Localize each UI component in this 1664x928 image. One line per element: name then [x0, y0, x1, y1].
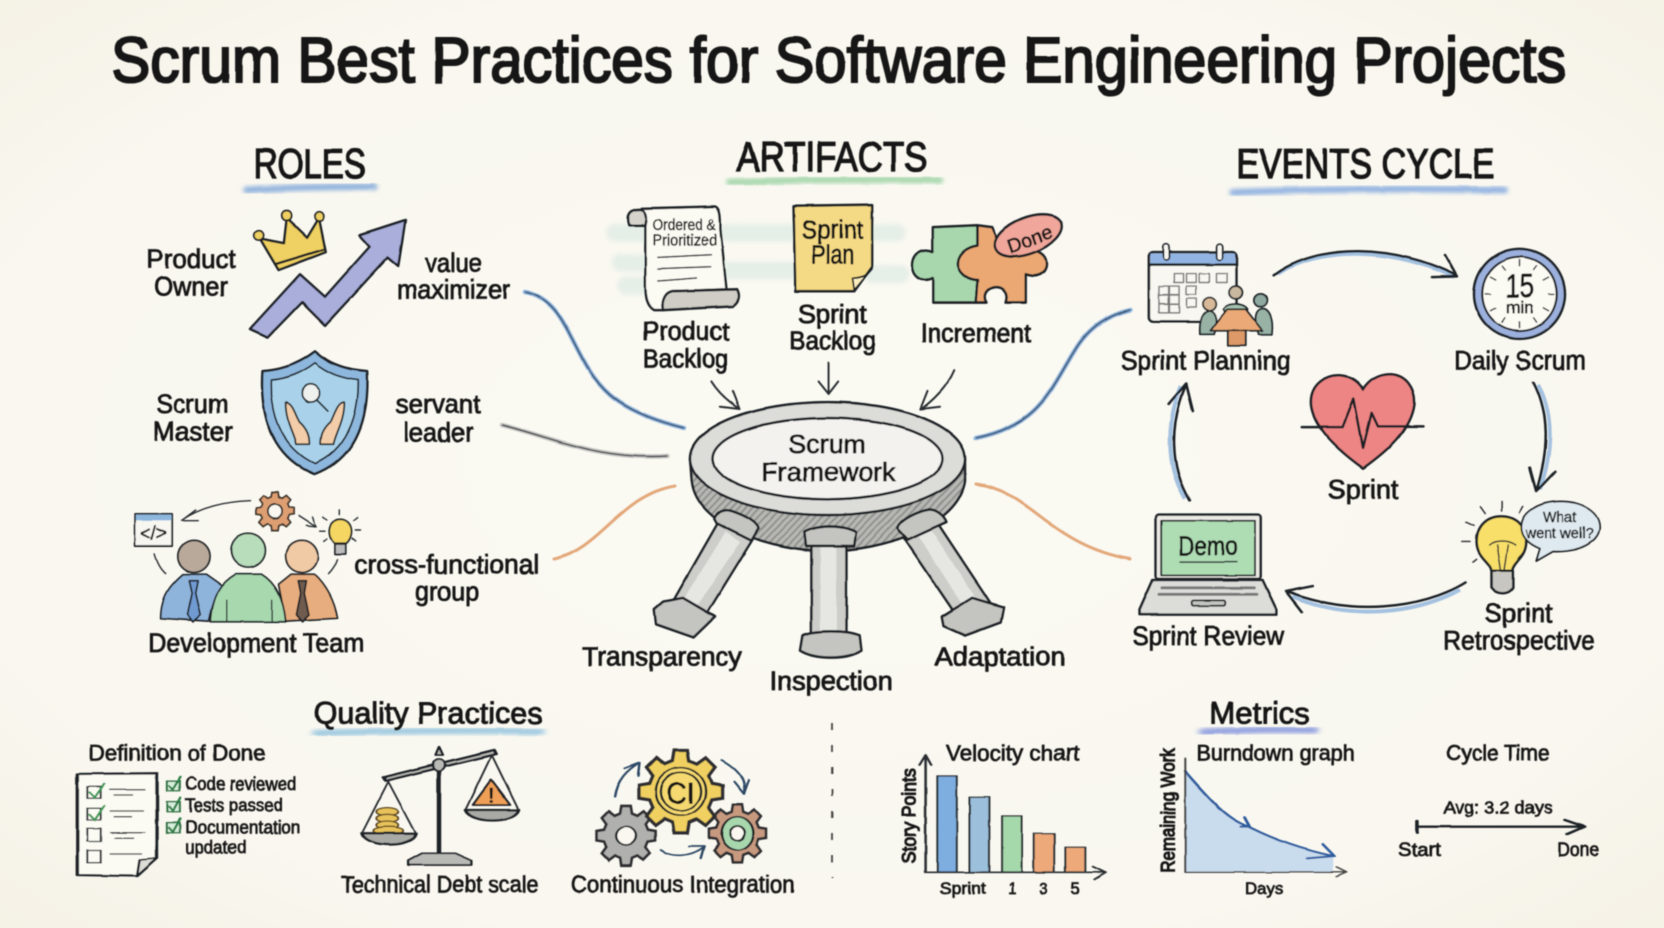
- person: left: [161, 540, 223, 622]
- label: Adaptation: Adaptation: [935, 643, 1066, 672]
- icon: crown: [254, 211, 326, 270]
- chart: cycle time: [1398, 741, 1599, 861]
- arrow: gear to lightbulb: [299, 516, 316, 526]
- icon: code window: </>: [140, 524, 167, 545]
- icon: puzzle increment: Done: [1005, 222, 1055, 258]
- label: Done: Done: [1557, 839, 1599, 861]
- label: servant leader: [396, 389, 481, 447]
- icon: retrospective lightbulb and speech bubble: What: [1543, 509, 1577, 526]
- label: value maximizer: value: [425, 248, 482, 278]
- axis label: Remaining Work: Remaining Work: [1158, 747, 1179, 873]
- axis ticks: 5: [1071, 879, 1080, 898]
- icon: code window: [135, 514, 172, 546]
- axes: [919, 755, 1106, 879]
- icon: sprint plan sticky note: Sprint: [802, 216, 863, 245]
- axis label: Story Points: Story Points: [899, 768, 920, 863]
- axis ticks: 1: [1008, 879, 1016, 898]
- pillar capitals: [714, 509, 946, 541]
- icon: puzzle increment: [912, 206, 1067, 302]
- icon: development team: [135, 492, 360, 622]
- panel: artifacts and framework: [582, 133, 1067, 696]
- icon: sprint planning calendar: [1149, 244, 1272, 346]
- label: Definition of Done: Definition of Done: [89, 741, 265, 765]
- checklist text: Code reviewed: [185, 774, 296, 795]
- table: scrum framework: [690, 402, 965, 551]
- arrow: product backlog to framework: [711, 382, 740, 409]
- arrow: retrospective to review: [1286, 582, 1465, 612]
- pillar: transparency: [654, 519, 752, 637]
- connector: framework to Sprint Review: [976, 484, 1130, 559]
- arrow: increment to framework: [920, 370, 954, 409]
- icon: lightbulb: [320, 510, 360, 554]
- icon: product backlog scroll: [628, 207, 739, 310]
- icon: retrospective lightbulb and speech bubble: [1462, 501, 1600, 593]
- icon: technical debt scale: !: [488, 784, 495, 807]
- label: value maximizer: [397, 248, 510, 305]
- label: Continuous Integration: Continuous Integration: [571, 871, 795, 898]
- connector: Product Owner to framework: [525, 292, 684, 428]
- icon: 15 min timer: [1474, 249, 1565, 339]
- burndown curve: [1185, 772, 1334, 858]
- bars: [937, 776, 1085, 872]
- icon: demo laptop: [1140, 515, 1276, 615]
- person: right: [279, 540, 337, 622]
- label: Velocity chart: Velocity chart: [946, 741, 1079, 766]
- label: Sprint Backlog: Backlog: [789, 327, 876, 356]
- connector: Development Team to framework: [554, 486, 675, 559]
- label: Product Backlog: Backlog: [643, 345, 728, 374]
- timeline arrow: [1417, 820, 1584, 834]
- label: cross-functional group: group: [415, 576, 479, 606]
- heading: events cycle: EVENTS CYCLE: [1236, 141, 1495, 188]
- label: Scrum Master: Scrum: [156, 389, 229, 419]
- label: Increment: Increment: [920, 319, 1031, 348]
- icon: 15 min timer: min: [1506, 298, 1534, 317]
- label: Product Owner: [146, 244, 236, 302]
- icon: rising arrow: [250, 220, 405, 337]
- axis ticks: 3: [1039, 879, 1048, 898]
- label: Development Team: Development Team: [148, 628, 364, 658]
- connector: Scrum Master to framework: [502, 425, 668, 457]
- icon: sprint heart: [1302, 374, 1423, 468]
- panel: roles: [135, 140, 539, 658]
- label: Cycle Time: Cycle Time: [1447, 741, 1550, 766]
- icon: continuous integration gears: [597, 750, 766, 865]
- label: Sprint: Sprint: [1328, 475, 1399, 504]
- label: Technical Debt scale: Technical Debt scale: [341, 871, 538, 898]
- connector: framework to Sprint Planning: [976, 310, 1130, 438]
- label: Product Owner: Product: [146, 244, 236, 274]
- label: Sprint Retrospective: [1443, 598, 1595, 655]
- axes: [1185, 758, 1347, 877]
- dashed divider: [831, 723, 833, 878]
- label: Scrum Master: Master: [153, 417, 233, 447]
- heading: artifacts: ARTIFACTS: [736, 133, 927, 180]
- axis ticks: Sprint: [940, 879, 986, 898]
- label: Burndown graph: Burndown graph: [1197, 741, 1355, 766]
- label: Days: Days: [1245, 879, 1283, 898]
- table: scrum framework: Framework: [761, 459, 896, 487]
- label: Transparency: Transparency: [582, 643, 742, 672]
- panel: metrics: [899, 696, 1599, 898]
- icon: people at table: [1200, 286, 1272, 346]
- icon: shield with hands: [262, 351, 367, 474]
- icon: technical debt scale: [362, 747, 519, 865]
- icon: continuous integration gears: CI: [667, 777, 694, 810]
- icon: retrospective lightbulb and speech bubble: went well?: [1525, 525, 1593, 542]
- pillar: inspection: [800, 526, 861, 658]
- icon: demo laptop: Demo: [1179, 532, 1237, 561]
- table: scrum framework: Scrum: [788, 430, 866, 459]
- label: Start: Start: [1398, 839, 1441, 861]
- checklist text: [167, 774, 300, 858]
- icon: product backlog scroll: Ordered &: [652, 217, 716, 234]
- icon: sprint plan sticky note: Plan: [811, 241, 854, 270]
- label: Inspection: Inspection: [770, 667, 893, 696]
- burndown area: [1185, 772, 1333, 872]
- label: servant leader: leader: [404, 417, 473, 447]
- icon: checklist page: [77, 773, 157, 876]
- heading: roles: ROLES: [254, 140, 366, 187]
- person: centre: [211, 533, 286, 622]
- label: cross-functional group: cross-functional: [354, 550, 539, 580]
- checklist text: Tests passed: [185, 796, 283, 816]
- checklist text: Documentation: [185, 818, 300, 838]
- chart: velocity: [899, 741, 1106, 898]
- chart: burndown: [1158, 741, 1355, 898]
- background wash: [615, 233, 901, 286]
- checklist text: updated: [185, 838, 246, 858]
- panel: quality practices: [77, 697, 795, 898]
- panel: events cycle: [1121, 141, 1600, 655]
- icon: gear: [256, 492, 294, 530]
- icon: sprint plan sticky note: [794, 205, 872, 291]
- label: Sprint Retrospective: Sprint: [1485, 598, 1553, 628]
- label: Sprint Planning: Sprint Planning: [1121, 346, 1290, 375]
- label: average: Avg: 3.2 days: [1443, 797, 1553, 817]
- arrow: gear to code window: [181, 501, 250, 521]
- label: Product Backlog: Product: [642, 318, 729, 346]
- arrow: sprint backlog to framework: [819, 363, 838, 394]
- heading: quality practices: Quality Practices: [314, 697, 542, 730]
- label: servant leader: servant: [396, 389, 481, 419]
- heading: metrics: Metrics: [1209, 696, 1310, 730]
- pillar: adaptation: [902, 519, 1004, 636]
- label: Sprint Review: Sprint Review: [1132, 622, 1285, 651]
- heading: metrics: [1204, 696, 1314, 732]
- label: value maximizer: maximizer: [397, 275, 510, 305]
- label: Scrum Master: [153, 389, 233, 447]
- label: cross-functional group: [354, 550, 539, 606]
- arrow: daily scrum to retrospective: [1530, 382, 1555, 491]
- label: Sprint Backlog: Sprint: [798, 301, 867, 329]
- label: Daily Scrum: Daily Scrum: [1454, 346, 1586, 375]
- title: Scrum Best Practices for Software Engineering Projects: [111, 24, 1566, 96]
- label: Product Owner: Owner: [154, 272, 228, 302]
- arrow: planning to daily scrum: [1274, 251, 1457, 277]
- axis ticks: [940, 879, 1080, 898]
- label: Sprint Backlog: [789, 301, 876, 356]
- icon: product backlog scroll: Prioritized: [652, 232, 717, 249]
- arrow: review to planning: [1169, 384, 1193, 500]
- label: Sprint Retrospective: Retrospective: [1443, 626, 1595, 655]
- icon: 15 min timer: 15: [1506, 268, 1534, 305]
- label: Product Backlog: [642, 318, 729, 374]
